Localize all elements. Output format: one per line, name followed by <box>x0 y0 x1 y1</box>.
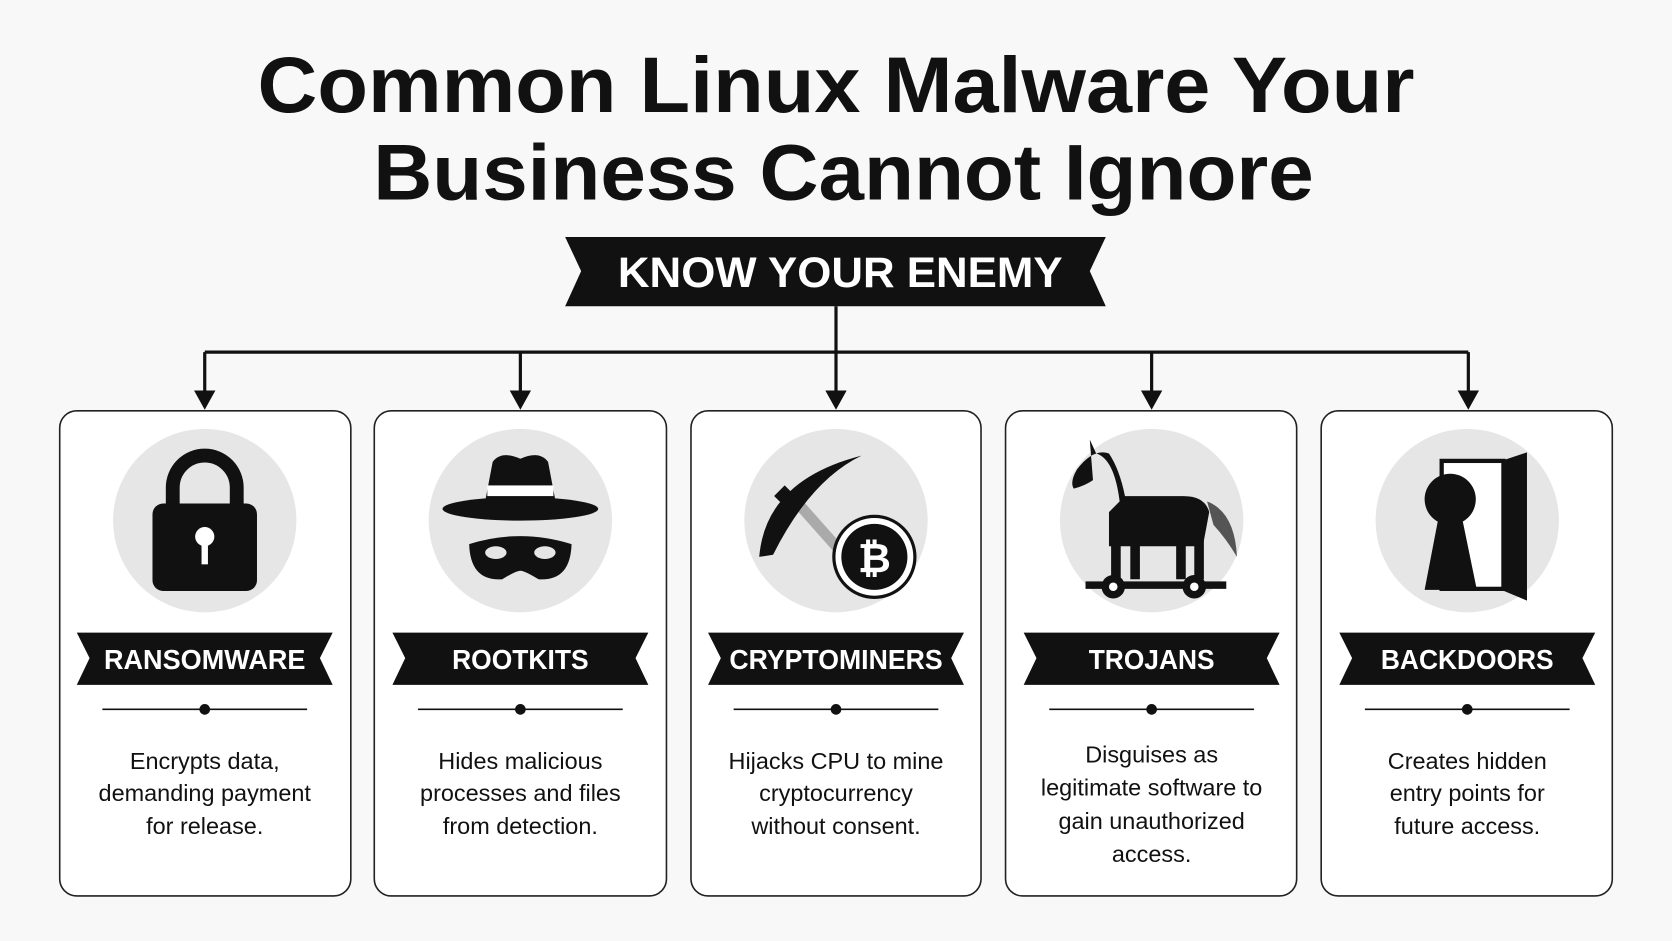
description: trojans: legitimate software to <box>1041 775 1262 801</box>
ribbon: ransomware <box>77 633 333 685</box>
description: cryptominers <box>729 748 943 839</box>
ribbon: trojans: TROJANS <box>1089 644 1215 675</box>
ribbon: ransomware: RANSOMWARE <box>104 644 306 675</box>
panel: rootkits <box>374 411 666 896</box>
banner: know your enemy: KNOW YOUR ENEMY <box>618 249 1063 297</box>
ribbon: backdoors: BACKDOORS <box>1381 644 1554 675</box>
description: cryptominers: without consent. <box>750 813 921 839</box>
panel: backdoors <box>1321 411 1612 896</box>
description: trojans <box>1041 742 1262 867</box>
panel: trojans <box>1006 411 1297 896</box>
icon: padlock <box>113 429 296 612</box>
description: rootkits <box>420 748 621 839</box>
icon: pickaxe and bitcoin <box>744 429 928 612</box>
ribbon: rootkits: ROOTKITS <box>452 644 589 675</box>
ribbon: rootkits <box>392 633 648 685</box>
panel: cryptominers <box>691 411 981 896</box>
icon: trojan horse <box>1060 429 1243 612</box>
description: backdoors: future access. <box>1394 813 1540 839</box>
description: ransomware: Encrypts data, <box>130 748 280 774</box>
icon: keyhole door <box>1376 429 1559 612</box>
description: ransomware: demanding payment <box>99 780 311 806</box>
icon: pickaxe and bitcoin: ₿ <box>858 535 891 581</box>
description: rootkits: processes and files <box>420 780 621 806</box>
description: backdoors <box>1388 748 1547 839</box>
title <box>258 41 1414 217</box>
description: rootkits: Hides malicious <box>438 748 602 774</box>
ribbon: cryptominers: CRYPTOMINERS <box>729 644 943 675</box>
panel: ransomware <box>60 411 351 896</box>
title: Common Linux Malware Your <box>258 41 1414 129</box>
ribbon: trojans <box>1024 633 1280 685</box>
description: trojans: Disguises as <box>1085 742 1218 768</box>
description: backdoors: Creates hidden <box>1388 748 1547 774</box>
description: trojans: access. <box>1112 841 1191 867</box>
description: cryptominers: cryptocurrency <box>759 780 913 806</box>
icon: spy hat and mask <box>429 429 612 612</box>
description: cryptominers: Hijacks CPU to mine <box>729 748 943 774</box>
description: ransomware: for release. <box>146 813 263 839</box>
banner: know your enemy <box>565 237 1106 306</box>
connector arrows <box>194 306 1479 410</box>
ribbon: backdoors <box>1339 633 1595 685</box>
description: trojans: gain unauthorized <box>1058 808 1245 834</box>
description: rootkits: from detection. <box>443 813 598 839</box>
ribbon: cryptominers <box>708 633 964 685</box>
title: Business Cannot Ignore <box>373 129 1314 217</box>
description: backdoors: entry points for <box>1390 780 1545 806</box>
description: ransomware <box>99 748 311 839</box>
